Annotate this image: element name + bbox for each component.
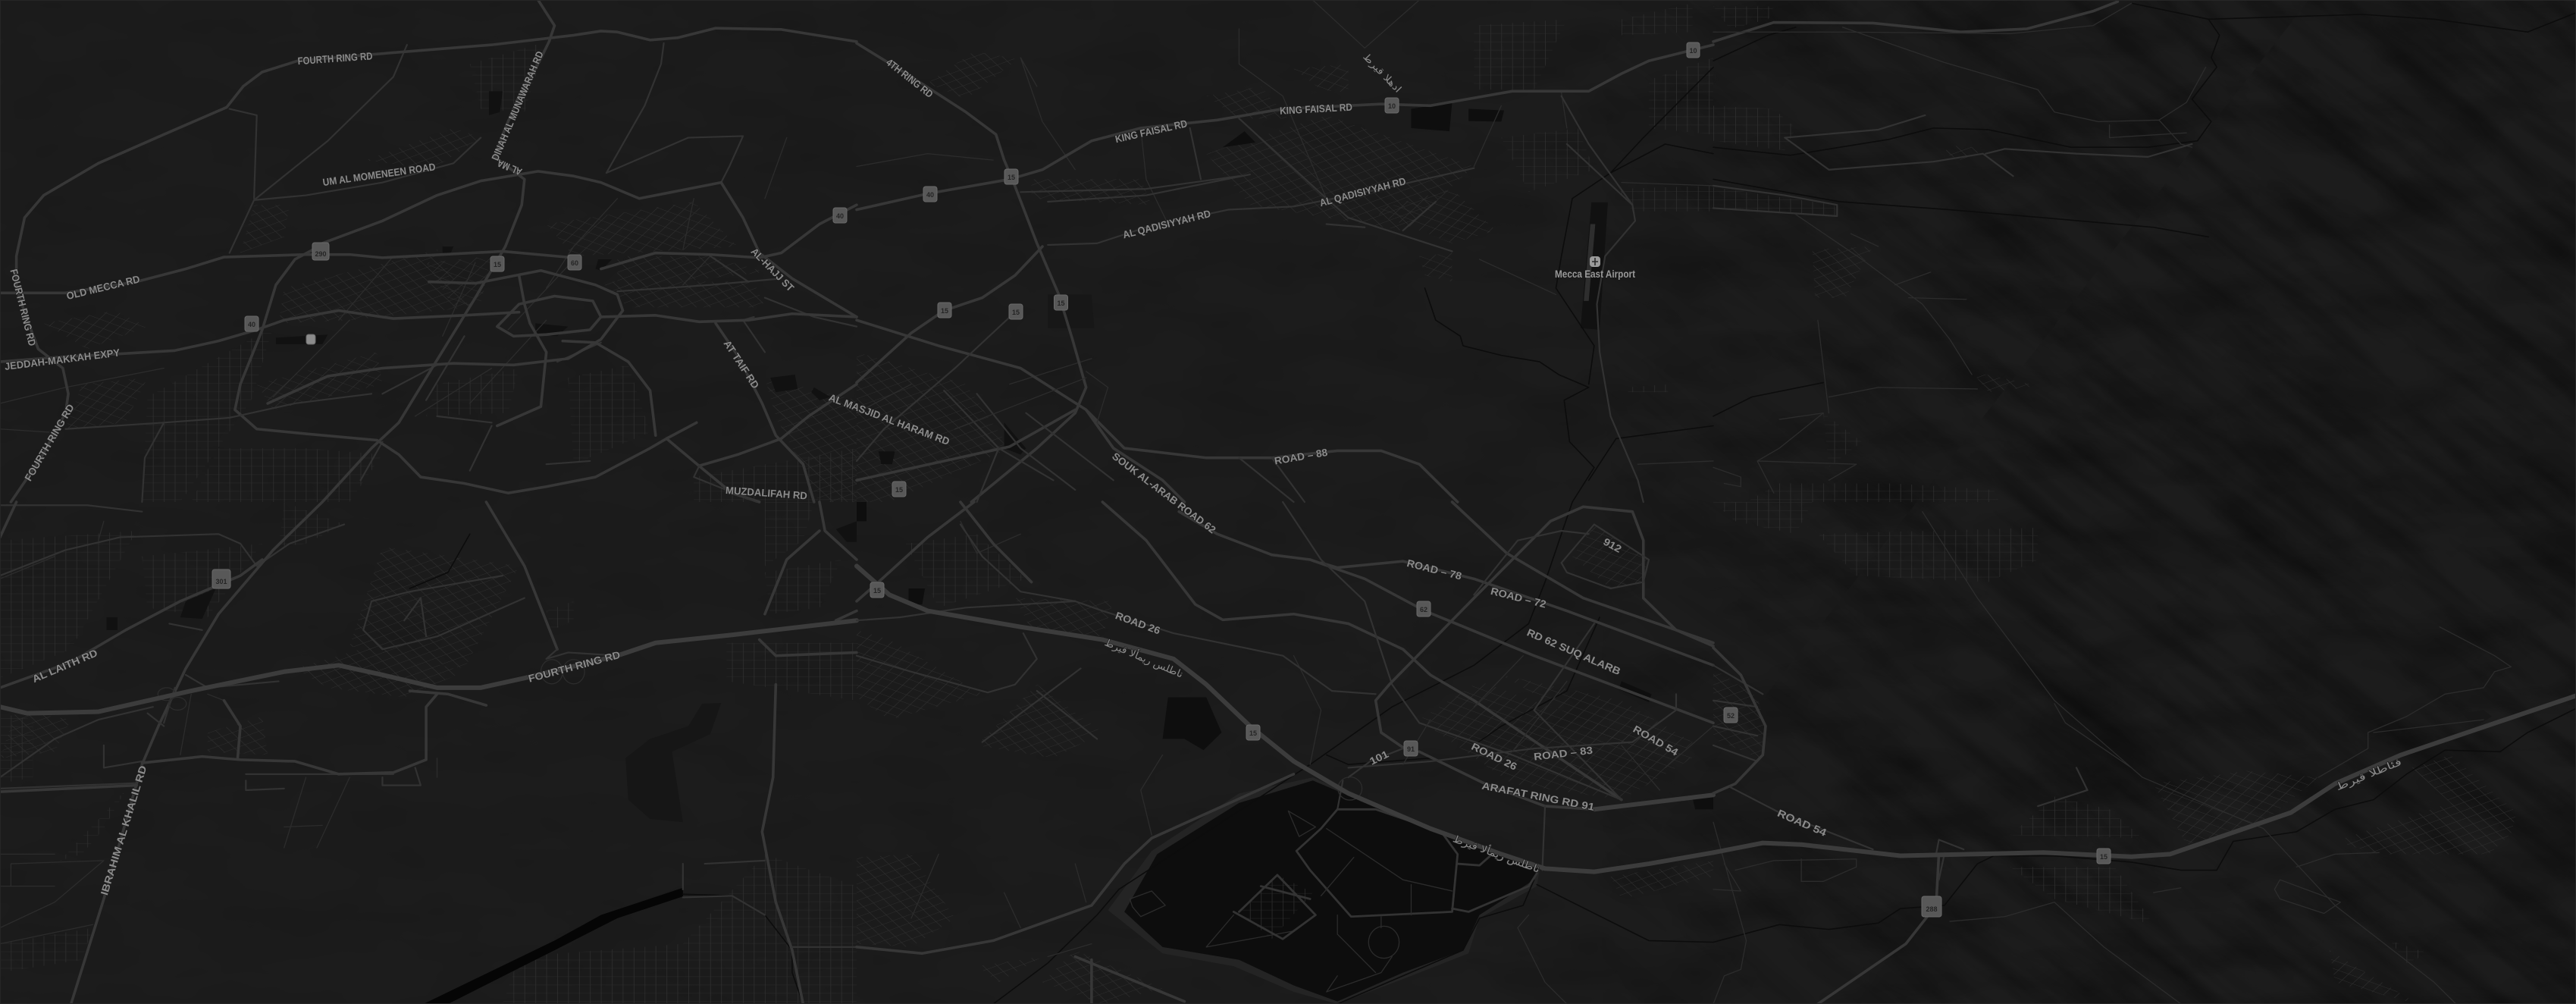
label: DINAH AL MUNAWARAH RD <box>490 49 546 162</box>
label: UM AL MOMENEEN ROAD <box>322 161 437 188</box>
street grid patches <box>44 42 857 502</box>
dark blocks and airport runway <box>879 102 1608 464</box>
shield 10 King Faisal <box>1385 98 1399 113</box>
shield 15: 15 <box>494 261 501 268</box>
shield 52: 52 <box>1727 712 1735 720</box>
shield 10 King Faisal: 10 <box>1388 102 1396 110</box>
shield 15 Haram: 15 <box>895 486 903 494</box>
shield 40 west: 40 <box>248 321 255 328</box>
roads <box>0 502 857 1004</box>
label: ROAD 26 <box>1114 610 1162 637</box>
label: FOURTH RING RD <box>527 649 622 685</box>
street grid patches <box>1713 502 2517 1004</box>
label: ROAD – 88 <box>1274 447 1329 467</box>
label: Mecca East Airport: Mecca East Airport <box>1555 268 1635 280</box>
label: ROAD – 83 <box>1533 745 1594 763</box>
shield 40 centre: 40 <box>926 191 934 199</box>
label: JEDDAH-MAKKAH EXPY <box>4 347 121 372</box>
rivers <box>993 502 1713 1004</box>
label: AL LAITH RD <box>30 647 99 685</box>
street grid patches <box>1713 6 2038 502</box>
shield 15 Muzdalifah: 15 <box>873 587 881 595</box>
roads <box>0 0 857 502</box>
label: AL MASJID AL HARAM RD <box>827 391 951 447</box>
tile: north-west roads <box>0 0 857 502</box>
river <box>1713 708 2576 943</box>
roads <box>857 0 1713 502</box>
label: طريق الهدا <box>1360 52 1403 96</box>
shield 40 centre <box>923 187 937 202</box>
label: ROAD 26 <box>1469 741 1519 773</box>
shield 91 <box>1404 741 1418 756</box>
label: OLD MECCA RD <box>65 273 141 302</box>
label: AL-HAJJ ST <box>749 246 797 294</box>
shield 15 interchange: 15 <box>1008 174 1015 181</box>
label: RD 62 SUQ ALARB <box>1525 626 1622 677</box>
shield 301: 301 <box>215 578 227 585</box>
shield 15 Sultan road <box>1246 725 1260 740</box>
shield 52 <box>1724 708 1738 723</box>
street grid patches <box>857 3 1713 502</box>
park <box>1108 777 1540 1004</box>
shield 290: 290 <box>315 250 327 258</box>
route shields <box>212 42 2111 917</box>
shield 60 east: 60 <box>571 259 578 267</box>
shield 15 east highway: 15 <box>2100 853 2107 861</box>
icon: airport <box>1590 256 1600 267</box>
shield small west <box>306 334 315 344</box>
rivers <box>1424 67 1713 502</box>
label: AL MA <box>495 157 524 177</box>
label: KING FAISAL RD <box>1280 102 1353 117</box>
roads <box>857 502 1713 1004</box>
tile: north-centre roads <box>857 0 1713 502</box>
roads <box>1713 2 2206 493</box>
shield 15 east: 15 <box>1057 300 1065 307</box>
shield 10 top: 10 <box>1689 47 1697 55</box>
shield 62 <box>1417 601 1431 617</box>
street grid patches <box>0 502 857 1004</box>
label: طريق الأمير سلطان <box>1451 831 1542 876</box>
shield 10 top <box>1687 42 1700 58</box>
shield 15 Muzdalifah <box>870 582 884 598</box>
label: SOUK AL-ARAB ROAD 62 <box>1110 450 1218 535</box>
label: 101 <box>1368 748 1391 767</box>
shield 15 east <box>1054 295 1067 310</box>
shield 288 <box>1922 896 1941 917</box>
label: FOURTH RING RD <box>297 50 373 67</box>
shield 91: 91 <box>1407 745 1415 753</box>
label: 912 <box>1601 536 1623 555</box>
rivers <box>1713 3 2576 416</box>
label: ROAD – 72 <box>1490 585 1547 610</box>
label: ARAFAT RING RD 91 <box>1481 780 1596 813</box>
tile: south-east roads <box>1713 502 2576 1004</box>
roads <box>1713 512 2576 1004</box>
shield 15 interchange <box>1004 169 1018 184</box>
shield 15 mid <box>1009 304 1023 319</box>
road name labels <box>4 49 2403 896</box>
tile: south-centre roads and park <box>857 502 1713 1004</box>
label: AT TAIF RD <box>722 338 761 391</box>
shield 288: 288 <box>1926 905 1938 913</box>
street grid patches <box>857 525 1713 1004</box>
label: AL QADISIYYAH RD <box>1318 175 1407 209</box>
shield 15 south: 15 <box>941 307 948 315</box>
dark blocks <box>276 91 830 400</box>
shield 15 mid: 15 <box>1012 309 1020 316</box>
label: ROAD 54 <box>1775 808 1829 839</box>
label: طريق الطائف <box>2334 757 2403 793</box>
shield 40: 40 <box>836 212 844 220</box>
tile: south-west roads <box>0 502 857 1004</box>
terrain hillshade <box>1770 6 2575 1003</box>
shield 15 Haram <box>892 482 906 497</box>
dark water and blocks <box>107 521 857 1004</box>
tile: north-east roads and wadis <box>1713 2 2576 502</box>
label: طريق الأمير سلطان <box>1103 635 1186 681</box>
shield 40 west <box>245 316 259 331</box>
label: FOURTH RING RD <box>23 402 77 483</box>
label: KING FAISAL RD <box>1114 118 1189 145</box>
label: ROAD – 78 <box>1406 557 1463 582</box>
shield 15 Sultan road: 15 <box>1249 729 1257 737</box>
label: AL QADISIYYAH RD <box>1122 208 1212 240</box>
label: MUZDALIFAH RD <box>725 485 808 501</box>
label: 4TH RING RD <box>884 56 935 100</box>
airport marker and label <box>1555 256 1635 280</box>
shield 301 <box>212 569 230 588</box>
shield 15 east highway <box>2097 849 2111 864</box>
label: FOURTH RING RD <box>8 268 38 347</box>
label: ROAD 54 <box>1631 723 1681 758</box>
shield 15 south <box>938 303 951 318</box>
dark blocks <box>857 502 1713 809</box>
shield 290 <box>312 243 329 260</box>
label: IBRAHIM AL KHALIL RD <box>99 764 149 896</box>
shield 60 east <box>568 255 581 270</box>
shield 15 <box>490 256 504 271</box>
shield 40 <box>833 208 847 223</box>
shield 62: 62 <box>1420 606 1427 613</box>
